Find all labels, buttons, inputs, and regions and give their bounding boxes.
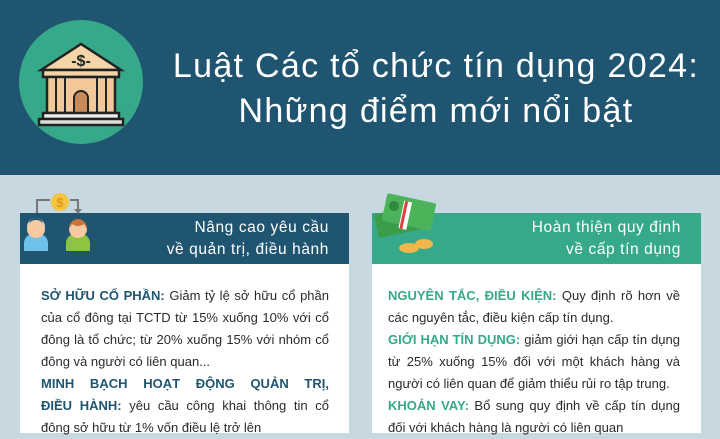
- panel text: credit: từ 25% xuống 15% đối với một khách hàng và: [388, 354, 680, 369]
- icon: bank in circle: [19, 20, 143, 144]
- panel: credit: [372, 213, 701, 433]
- panel text: governance: SỞ HỮU CỔ PHẦN: Giảm tỷ lệ sở hữu cổ phần: [41, 288, 329, 303]
- panel text: credit: KHOẢN VAY: Bổ sung quy định về cấp tín dụng: [388, 398, 680, 413]
- panel text: governance: đông sở hữu từ 1% vốn điều lệ trở lên: [41, 420, 261, 435]
- panel text: credit: [388, 288, 680, 435]
- panel text: governance: đông và người có liên quan...: [41, 354, 210, 369]
- title: [173, 47, 699, 130]
- panel heading: governance: về quản trị, điều hành: [167, 241, 329, 258]
- panel text: governance: [41, 288, 329, 435]
- panel heading: credit: Hoàn thiện quy định: [532, 219, 681, 236]
- panel text: credit: đối với khách hàng là người có liên quan: [388, 420, 623, 435]
- title: Luật Các tổ chức tín dụng 2024:: [173, 47, 699, 85]
- panel heading: credit: về cấp tín dụng: [566, 241, 681, 258]
- panel: governance: [20, 213, 349, 433]
- title: Những điểm mới nổi bật: [239, 92, 633, 130]
- panel text: credit: NGUYÊN TẮC, ĐIỀU KIỆN: Quy định rõ hơn về: [388, 288, 680, 303]
- panel heading: governance: [20, 213, 349, 264]
- icon: people with coin: [24, 193, 90, 251]
- panel heading: credit: [372, 213, 701, 264]
- panel text: credit: các nguyên tắc, điều kiện cấp tín dụng.: [388, 310, 614, 325]
- panel text: governance: ĐIỀU HÀNH: yêu cầu công khai thông tin cổ: [41, 398, 329, 413]
- header band: [0, 0, 720, 175]
- panel text: governance: của cổ đông tại TCTD từ 15% xuống 10% với cổ: [41, 310, 329, 325]
- panel heading: governance: Nâng cao yêu cầu: [194, 219, 329, 236]
- panel text: credit: GIỚI HẠN TÍN DỤNG: giảm giới hạn cấp tín dụng: [388, 332, 680, 347]
- panel text: governance: đông là tổ chức; từ 20% xuống 15% với nhóm cổ: [41, 332, 329, 347]
- panel text: credit: người có liên quan để giảm thiểu rủi ro tập trung.: [388, 376, 670, 391]
- panel text: governance: MINH BẠCH HOẠT ĐỘNG QUẢN TRỊ,: [41, 376, 329, 391]
- icon: bank in circle: -$-: [71, 53, 91, 70]
- icon: money stack: [374, 194, 436, 253]
- icon: people with coin: $: [56, 195, 64, 210]
